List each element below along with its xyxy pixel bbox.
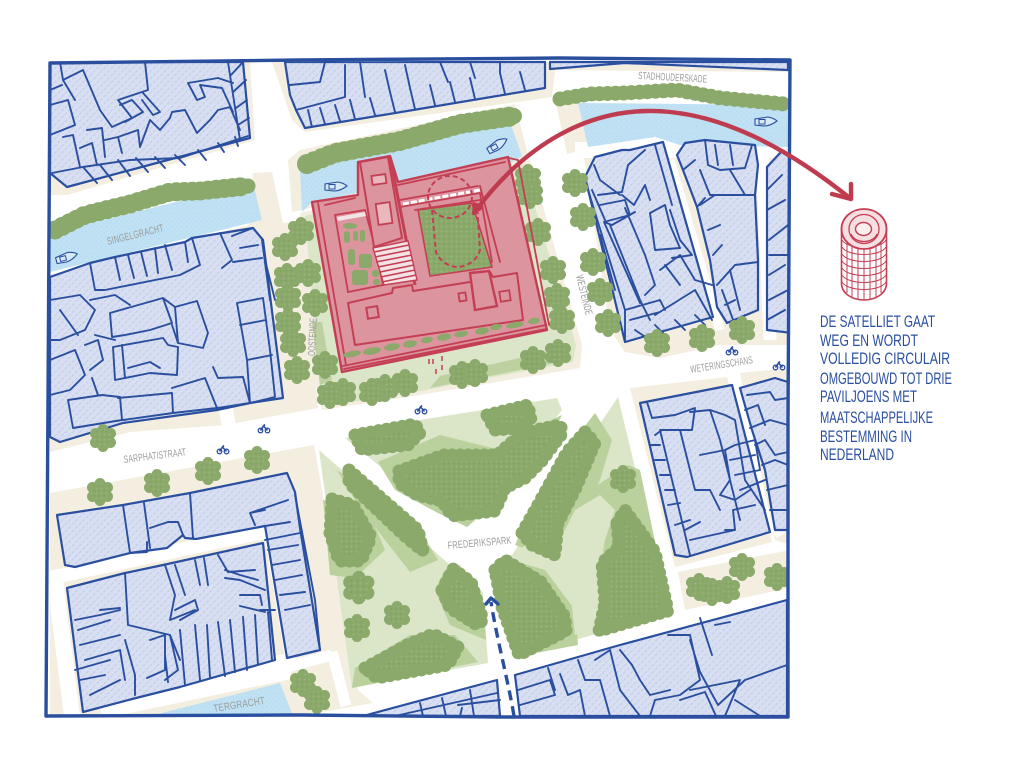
map frame <box>46 58 790 717</box>
right courtyard with dashed footprint <box>400 176 500 276</box>
cyclists <box>217 346 785 454</box>
caption: VOLLEDIG CIRCULAIR <box>820 350 950 368</box>
caption <box>820 313 952 464</box>
street labels: WETERINGSCHANS <box>690 354 754 376</box>
outer roof edges <box>318 158 549 369</box>
buildings: far right block <box>740 378 788 530</box>
canal: Stadhouderskade <box>578 103 790 147</box>
buildings: mid right block <box>640 385 770 557</box>
buildings: left large block <box>50 228 283 442</box>
canal: Singelgracht <box>50 183 262 272</box>
buildings: top left block <box>50 62 250 187</box>
street labels <box>106 70 754 715</box>
icon: cylindrical pavilion <box>842 209 886 300</box>
stairs <box>373 241 417 285</box>
hospital garden <box>300 160 582 410</box>
tower <box>360 157 415 285</box>
red arrow to cylinder <box>473 111 851 214</box>
caption: PAVILJOENS MET <box>820 388 917 406</box>
front wing <box>348 271 523 345</box>
canal: bottom <box>158 683 292 714</box>
street labels: TERGRACHT <box>213 695 266 715</box>
roads between blocks <box>50 150 790 716</box>
street labels: WESTEINDE <box>573 274 595 317</box>
park lawn: north <box>345 398 562 527</box>
street labels: SARPHATISTRAAT <box>123 446 187 466</box>
buildings: east block C <box>767 152 792 333</box>
caption: MAATSCHAPPELIJKE <box>820 409 933 427</box>
park lawn: east <box>495 397 635 640</box>
entrance figures <box>429 356 442 374</box>
street labels: STADHOUDERSKADE <box>638 70 707 86</box>
caption: OMGEBOUWD TOT DRIE <box>820 370 952 388</box>
boats <box>55 117 777 264</box>
green banks <box>55 90 784 230</box>
buildings: lower left upper block <box>57 473 320 658</box>
street labels: FREDERIKSPARK <box>447 534 512 552</box>
caption: DE SATELLIET GAAT <box>820 313 935 331</box>
dashed entry arrow <box>486 598 514 716</box>
buildings: bottom strip <box>363 600 787 716</box>
trees <box>87 164 790 714</box>
buildings: sliver top right <box>550 62 788 70</box>
canal: hospital <box>300 122 522 212</box>
hospital front plantings <box>343 317 540 359</box>
left courtyard <box>335 210 383 292</box>
tree masses <box>330 405 668 678</box>
buildings: lower left lower block <box>67 543 275 712</box>
caption: NEDERLAND <box>820 446 894 464</box>
street labels: SINGELGRACHT <box>106 222 165 248</box>
caption: WEG EN WORDT <box>820 332 918 350</box>
hospital building <box>312 156 549 374</box>
caption: BESTEMMING IN <box>820 428 912 446</box>
buildings: east block B <box>677 140 758 325</box>
street labels: OOSTEINDE <box>306 318 320 356</box>
buildings: east block A <box>585 142 713 342</box>
map <box>50 62 792 716</box>
ground: sidewalk blocks <box>50 62 790 716</box>
park lawn: west <box>319 450 488 688</box>
Frederikspark <box>319 397 670 688</box>
buildings: top centre block <box>285 62 545 128</box>
